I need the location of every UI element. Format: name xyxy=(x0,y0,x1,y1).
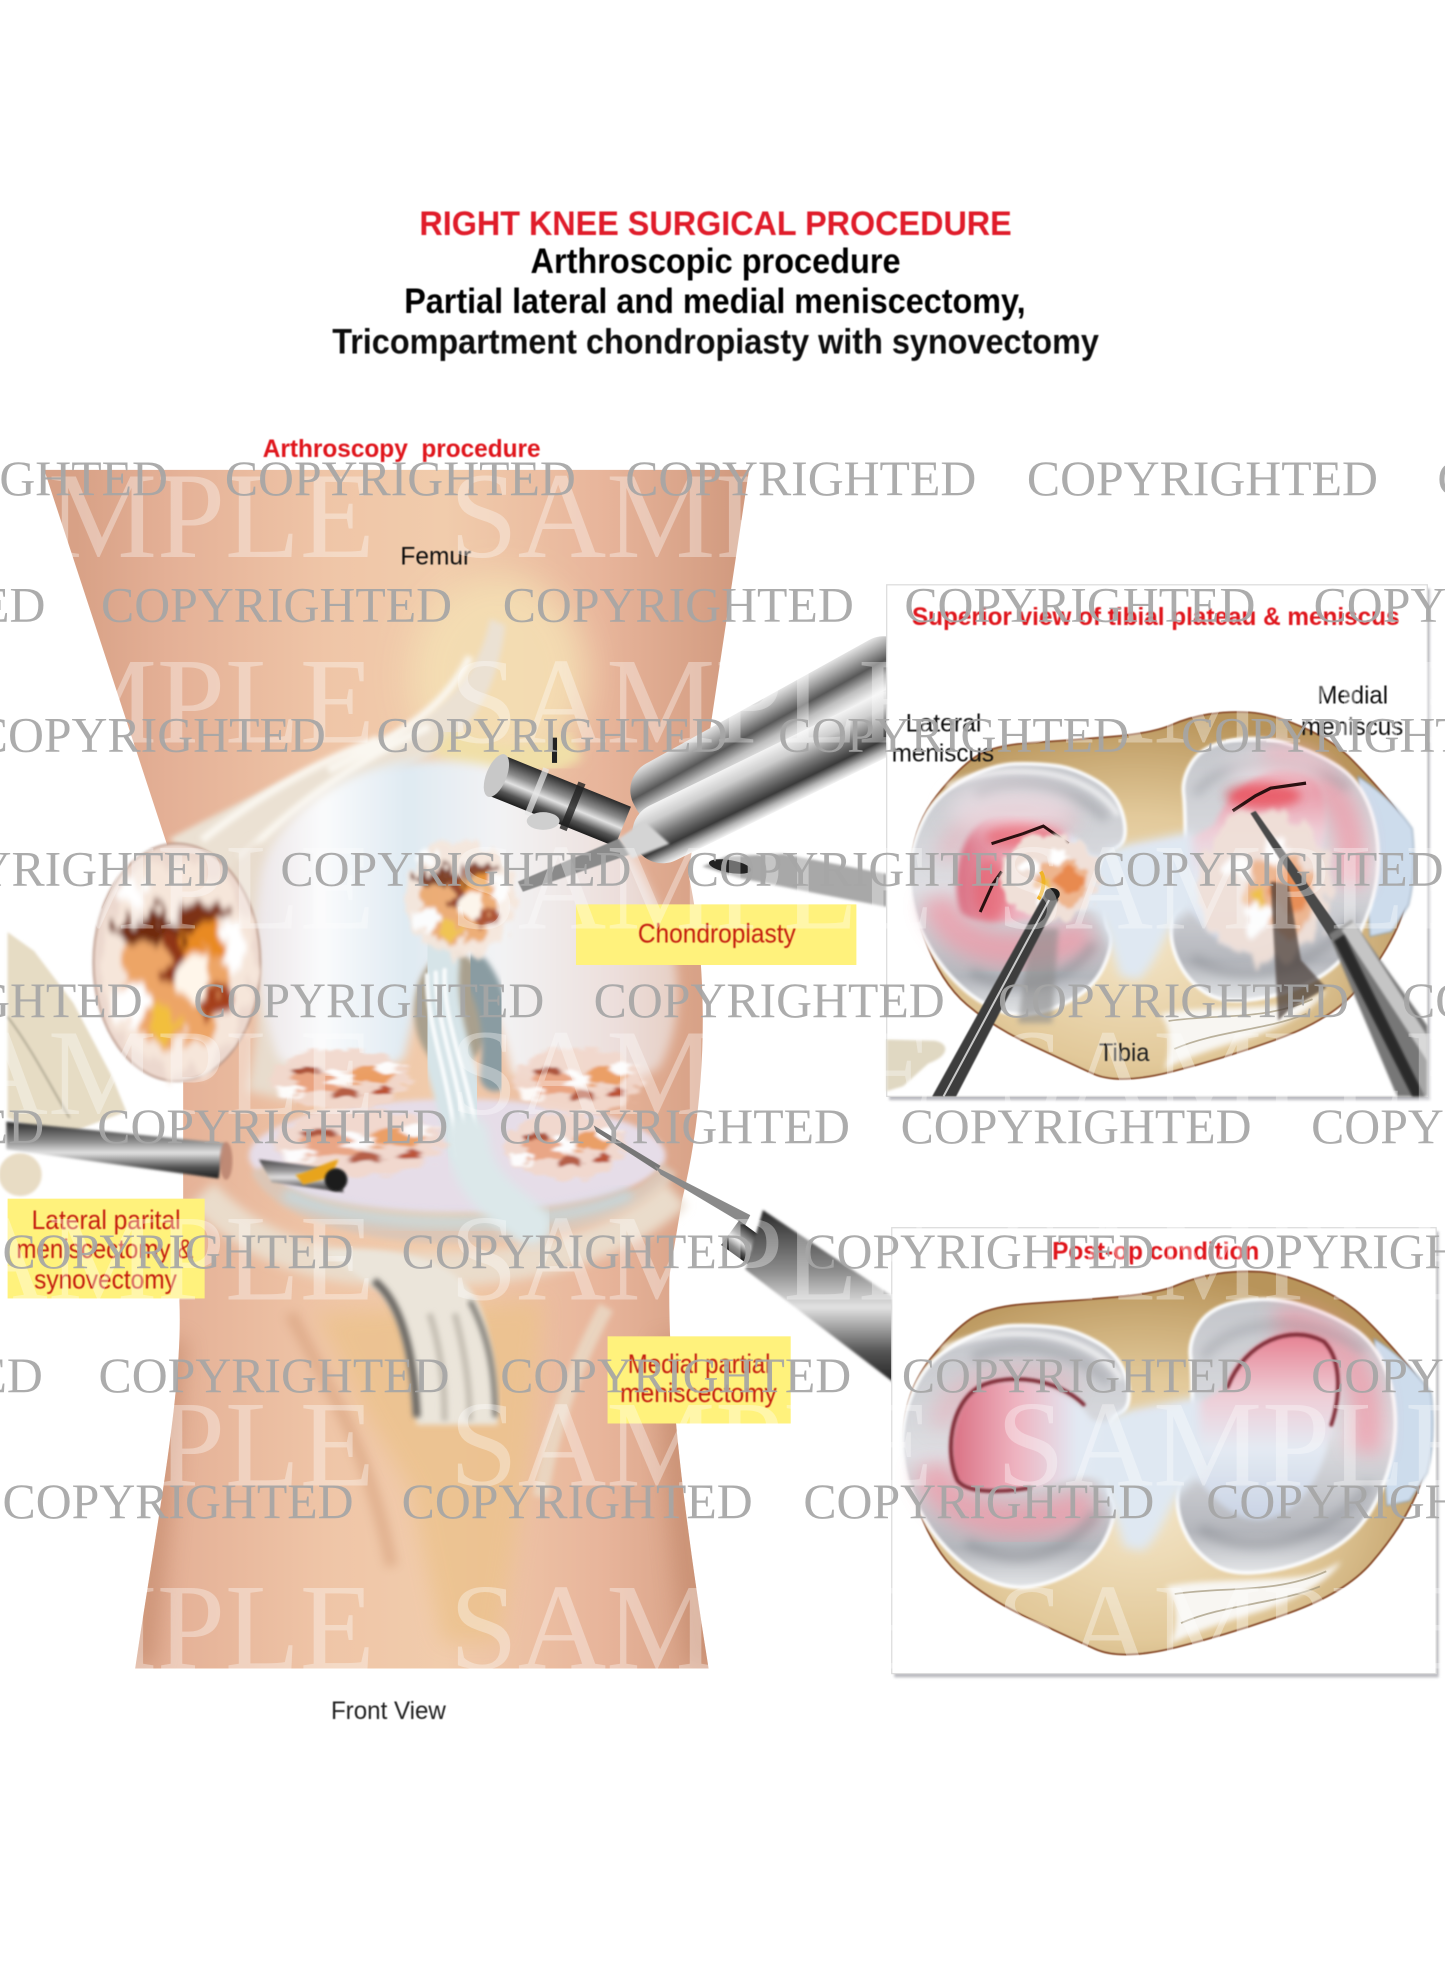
label: tibia: Tibia xyxy=(1099,1039,1150,1067)
panel shadow xyxy=(889,589,1430,1100)
panel shadow xyxy=(894,1232,1439,1677)
panel: superior view of tibial plateau and meniscus xyxy=(887,585,1430,1100)
label: lateral meniscus xyxy=(892,709,994,768)
scope third instrument xyxy=(702,854,887,907)
tibial plateau illustration xyxy=(902,1272,1433,1655)
left instrument tip and cautery xyxy=(259,1160,347,1192)
watermark: copyrighted rows: COPYRIGHTED xyxy=(3,1474,354,1529)
cartilage damage: lateral meniscus xyxy=(276,1110,444,1176)
upper arthroscope camera xyxy=(478,625,932,907)
watermark: sample rows: SAMPLE xyxy=(450,820,933,955)
callout: chondroplasty: Chondroplasty xyxy=(638,918,796,948)
scope needle xyxy=(518,839,632,892)
callout: lateral partial meniscectomy: meniscectomy & xyxy=(16,1234,194,1264)
panel: post-op condition xyxy=(892,1228,1439,1677)
callout: lateral partial meniscectomy: synovectomy xyxy=(34,1264,178,1294)
watermark: copyrighted rows: COPYRIGHTED xyxy=(803,1224,1154,1279)
watermark: copyrighted rows: COPYRIGHTED xyxy=(97,1099,448,1154)
watermark: copyrighted rows: COPYRIGHTED xyxy=(625,451,976,506)
watermark: copyrighted rows: COPYRIGHTED xyxy=(225,451,576,506)
femoral condyles xyxy=(256,760,678,1088)
watermark: copyrighted rows: COPYRIGHTED xyxy=(1027,451,1378,506)
gloved hand xyxy=(0,932,126,1196)
watermark: copyrighted rows: COPYRIGHTED xyxy=(901,1099,1252,1154)
quadriceps tendon xyxy=(169,619,575,1096)
callout: lateral partial meniscectomy xyxy=(8,1199,205,1298)
patella with damaged cartilage xyxy=(93,844,260,1081)
callout: medial partial meniscectomy: Medial partial xyxy=(628,1349,770,1379)
instrument shadows xyxy=(1018,882,1326,1023)
watermark: sample rows: SAMPLE xyxy=(450,635,933,770)
caption: front view: Front View xyxy=(331,1697,447,1725)
watermark: copyrighted rows: COPYRIGHTED xyxy=(803,1474,1154,1529)
cartilage damage: lateral femoral condyle xyxy=(271,1050,411,1110)
cartilage damage: trochlea xyxy=(406,842,516,957)
watermark: copyrighted rows: COPYRIGHTED xyxy=(376,708,727,763)
watermark: copyrighted rows: COPYRIGHTED xyxy=(280,841,631,896)
red halo and crack: lateral xyxy=(974,824,1069,921)
watermark: copyrighted rows: COPYRIGHTED xyxy=(499,1099,850,1154)
watermark: copyrighted rows xyxy=(0,451,1445,1529)
subtitle line 3: Tricompartment chondropiasty with synovectomy xyxy=(332,324,1100,362)
cartilage damage: medial meniscus xyxy=(505,1114,627,1180)
cruciate ligaments xyxy=(414,952,531,1225)
callout: lateral partial meniscectomy: Lateral parital xyxy=(32,1205,181,1235)
label: lateral meniscus: meniscus xyxy=(892,740,994,768)
callout: medial partial meniscectomy: meniscectomy xyxy=(620,1378,777,1408)
left lower skin shadow band xyxy=(291,1314,392,1566)
watermark: copyrighted rows: COPYRIGHTED xyxy=(99,1348,450,1403)
tibial plateau illustration xyxy=(910,712,1414,1079)
watermark: sample rows: SAMPLE xyxy=(450,1192,933,1327)
damaged meniscus: lateral xyxy=(1002,835,1100,920)
patellar tendon xyxy=(322,1249,498,1425)
title xyxy=(332,205,1100,362)
trimmed meniscus edges xyxy=(951,1335,1338,1491)
panel: knee front view illustration xyxy=(0,470,932,1669)
incision ring xyxy=(220,1142,232,1180)
watermark: copyrighted rows: COPYRIGHTED xyxy=(778,708,1129,763)
watermark: copyrighted rows: COPYRIGHTED xyxy=(998,973,1349,1028)
watermark: copyrighted rows: COPYRIGHTED xyxy=(500,1348,851,1403)
label: medial meniscus: meniscus xyxy=(1301,713,1403,741)
watermark: copyrighted rows: COPYRIGHTED xyxy=(594,973,945,1028)
label: medial meniscus: Medial xyxy=(1317,682,1388,710)
watermark: copyrighted rows: COPYRIGHTED xyxy=(3,1224,354,1279)
left instrument shaft xyxy=(6,1122,225,1178)
subtitle line 2: Partial lateral and medial meniscectomy, xyxy=(404,283,1026,321)
watermark: copyrighted rows: COPYRIGHTED xyxy=(1093,841,1444,896)
watermark: copyrighted rows: COPYRIGHTED xyxy=(503,577,854,632)
panel heading: Superior view of tibial plateau & meniscus xyxy=(912,603,1400,631)
leg silhouette xyxy=(44,470,749,1669)
watermark: copyrighted rows: COPYRIGHTED xyxy=(902,1348,1253,1403)
watermark: copyrighted rows: COPYRIGHTED xyxy=(904,577,1255,632)
lower leg edge shading xyxy=(139,1339,702,1665)
watermark: sample rows: SAMPLE xyxy=(450,1561,933,1696)
lateral tendon streaks xyxy=(541,1307,606,1497)
scope connector xyxy=(478,748,632,850)
watermark: copyrighted rows: COPYRIGHTED xyxy=(402,1224,753,1279)
lower leg tan shin xyxy=(316,1301,543,1642)
lateral instrument xyxy=(932,872,1060,1096)
third instrument dark tip xyxy=(708,857,752,876)
cartilage damage: medial condyle xyxy=(515,1048,642,1114)
red halo and crack: medial xyxy=(1225,783,1306,811)
watermark: copyrighted rows: COPYRIGHTED xyxy=(686,841,1037,896)
scope barrel one xyxy=(619,625,927,836)
panel heading: Post-op condition xyxy=(1052,1237,1259,1265)
medial instrument xyxy=(1250,811,1427,1096)
panel background xyxy=(892,1228,1436,1674)
watermark: sample rows: SAMPLE xyxy=(450,1377,933,1512)
callout: medial partial meniscectomy xyxy=(608,1336,791,1423)
label: femur: Femur xyxy=(400,543,471,571)
panel background xyxy=(887,585,1427,1096)
watermark: copyrighted rows: COPYRIGHTED xyxy=(101,577,452,632)
watermark: sample rows xyxy=(0,449,1445,1696)
watermark: copyrighted rows: COPYRIGHTED xyxy=(402,1474,753,1529)
label: lateral meniscus: Lateral xyxy=(906,709,981,737)
damaged meniscus: medial xyxy=(1199,812,1332,961)
watermark: copyrighted rows: COPYRIGHTED xyxy=(193,973,544,1028)
label: medial meniscus xyxy=(1301,682,1403,741)
scope barrel two xyxy=(622,681,932,874)
heading: arthroscopy procedure: Arthroscopy procedure xyxy=(263,436,541,463)
callout: chondroplasty xyxy=(576,904,856,965)
tibial plateau xyxy=(202,1099,676,1270)
pale wash on menisci xyxy=(947,750,1326,836)
title line: red heading: RIGHT KNEE SURGICAL PROCEDURE xyxy=(419,205,1012,243)
watermark: sample rows: SAMPLE xyxy=(450,1006,933,1141)
glove in panel xyxy=(887,1040,945,1091)
lower right instrument xyxy=(594,1125,899,1387)
thigh highlight xyxy=(411,575,587,777)
watermark: sample rows: SAMPLE xyxy=(450,449,933,584)
subtitle line 1: Arthroscopic procedure xyxy=(531,243,901,281)
